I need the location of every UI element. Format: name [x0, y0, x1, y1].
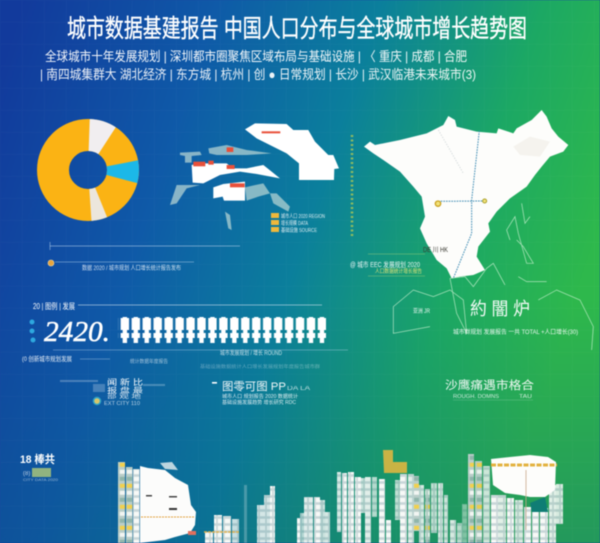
map: central island [192, 163, 280, 183]
stats block: right: TAU [519, 394, 532, 400]
divider and row labels: (0 创新城市规划发展 [22, 354, 72, 363]
map legend: 城市人口 2020 REGION [281, 212, 325, 220]
yellow tower top [383, 450, 407, 473]
right-side caption [350, 254, 425, 276]
map: northern island [245, 123, 339, 180]
stats block: left: 报 盘 最 [107, 386, 143, 394]
stats block: right [445, 378, 535, 400]
green region heading: 約 闇 炉 [470, 299, 530, 319]
big number: 2420. [44, 317, 110, 348]
small islands map [170, 123, 339, 230]
divider and row labels: 城市发展规划 / 增长 ROUND [220, 349, 283, 357]
map: southern island [213, 182, 245, 201]
yellow dotted scale [351, 135, 353, 238]
map: red markers [193, 131, 280, 187]
stats block: left: 闻 新 比 [107, 377, 143, 387]
right-side caption: @ 城市 EEC 发展规划 2020 [350, 260, 420, 269]
stats block: right: 沙鹰痛遇市格合 [445, 378, 535, 392]
skyline: right cluster [462, 454, 563, 543]
bottom-left label: 18 棒共 [20, 452, 55, 466]
map legend: 增长规模 DATA [281, 219, 308, 227]
map: location markers [435, 201, 441, 206]
section label: stats: 20 | 图例 | 发展 [33, 301, 75, 311]
stats block: left: 部 观 地 [107, 392, 141, 400]
bottom-left label [20, 452, 59, 482]
white map blob [140, 466, 196, 543]
map: dashed routes [453, 131, 479, 278]
stats block: left [60, 377, 165, 407]
timeline lines [48, 242, 240, 272]
stats block: left: EXT CITY 110 [104, 401, 140, 407]
green region caption: 城市群规划 发展报告 一共 TOTAL +人口增长(30) [453, 328, 578, 336]
divider and row labels: 基础设施数据统计人口增长发展规划年度报告城市群 [200, 363, 321, 370]
skyline: middle-left cluster [204, 485, 300, 543]
timeline lines: 数据 2020 / 城市规划 人口增长统计报告发布 [82, 264, 181, 272]
skyline: left cluster [118, 462, 196, 543]
map legend: 基础设施 SOURCE [281, 226, 317, 234]
bottom-left label: (8) [23, 471, 30, 477]
right-side caption: 人口数据统计增长报告 [375, 267, 422, 275]
map legend [271, 212, 325, 234]
subtitle: | 南四城集群大 湖北经济 | 东方城 | 杭州 | 创 ● 日常规划 | 长沙 | 武汉临港未来城市(3) [40, 67, 476, 82]
subtitle: 全球城市十年发展规划 | 深圳都市圈聚焦区域布局与基础设施 | 〈 重庆 | 成都 | 合肥 [45, 49, 467, 64]
map city label: DE 川 HK [423, 246, 448, 254]
white map blob [491, 455, 556, 497]
stats block: centre: 图零可图 PP [222, 380, 286, 393]
subtitle [40, 49, 476, 82]
stats block: centre: DA LA [287, 386, 310, 392]
divider and row labels [22, 349, 348, 370]
skyline: centre cluster [300, 450, 462, 543]
stats block: centre: 基础设施发展趋势 增长研究 RDC [222, 399, 296, 406]
map terrain [513, 137, 550, 157]
stats block: centre [212, 380, 310, 406]
stats block: centre: 城市人口 规划报告 2020 数据统计 [222, 393, 298, 400]
map small label: 亚洲 JR [413, 308, 431, 315]
pale outline maps [393, 203, 593, 350]
map: pale islands [170, 145, 290, 230]
large map [364, 110, 568, 278]
bottom-left label: CITY DATA 2020 [23, 477, 59, 482]
pictogram bars [118, 317, 326, 343]
stats block: right: ROUGH. DOMNS [453, 394, 499, 400]
divider and row labels: 统计数据年度报告 [130, 358, 168, 365]
donut chart [53, 135, 123, 205]
